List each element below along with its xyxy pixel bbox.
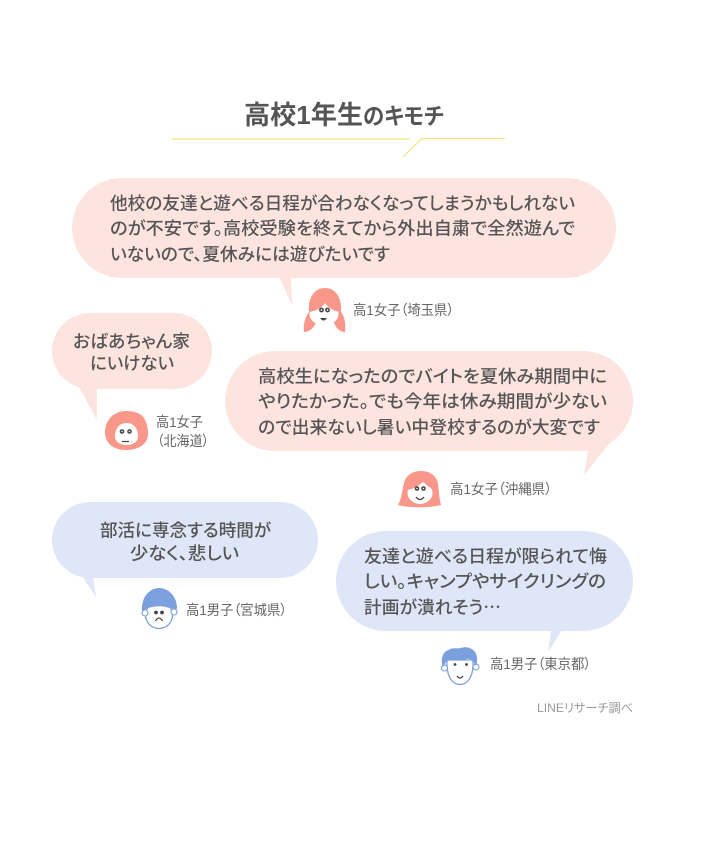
label: Hokkaido: （北海道） (157, 433, 209, 449)
panel: bubble Tokyo (336, 531, 633, 652)
label: Hokkaido: 高1女子 (156, 414, 203, 430)
text: Saitama comment: いないので、夏休みには遊びたいです (110, 245, 390, 265)
text: Saitama comment: のが不安です。高校受験を終えてから外出自粛で全然遊んで (110, 219, 575, 239)
text: Miyagi comment: 少なく、悲しい (130, 544, 239, 564)
title: 高校1年生 (244, 100, 363, 130)
label: Okinawa: 高1女子（沖縄県） (450, 481, 552, 497)
title (244, 100, 444, 130)
text: Tokyo comment: しい。キャンプやサイクリングの (364, 572, 606, 592)
panel: bubble Grandma (52, 313, 212, 420)
title underline (172, 138, 505, 157)
label: Miyagi: 高1男子（宮城県） (186, 602, 287, 618)
text: Tokyo comment: 計画が潰れそう… (364, 595, 501, 620)
text: Grandma comment: おばあちゃん家 (73, 332, 190, 352)
text: Grandma comment (73, 332, 190, 374)
icon: boy Tokyo (442, 647, 479, 684)
text: Tokyo comment: 友達と遊べる日程が限られて悔 (364, 547, 607, 567)
text: Saitama comment: 他校の友達と遊べる日程が合わなくなってしまうかもしれない (110, 194, 575, 214)
panel: bubble Okinawa (225, 351, 633, 475)
text: Grandma comment: にいけない (90, 354, 174, 374)
label: Hokkaido (156, 414, 209, 449)
label: Tokyo: 高1男子（東京都） (490, 656, 591, 672)
title: のキモチ (363, 103, 444, 129)
text: Saitama comment (110, 194, 575, 265)
text: Miyagi comment: 部活に専念する時間が (100, 521, 272, 541)
icon: girl Saitama (304, 288, 345, 332)
label: Saitama: 高1女子（埼玉県） (353, 302, 454, 318)
icon: girl Okinawa (398, 471, 441, 507)
text: Okinawa comment (257, 367, 607, 438)
panel: bubble Miyagi (52, 502, 318, 597)
panel: bubble Saitama (72, 178, 616, 305)
text: Miyagi comment (100, 521, 272, 564)
icon: girl Hokkaido (105, 411, 148, 450)
text: Tokyo comment (364, 547, 607, 620)
icon: boy Miyagi (142, 588, 177, 628)
source note: LINEリサーチ調べ (537, 701, 633, 715)
text: Okinawa comment: ので出来ないし暑い中登校するのが大変です (258, 418, 600, 438)
text: Okinawa comment: 高校生になったのでバイトを夏休み期間中に (258, 367, 607, 387)
text: Okinawa comment: やりたかった。でも今年は休み期間が少ない (257, 392, 607, 412)
